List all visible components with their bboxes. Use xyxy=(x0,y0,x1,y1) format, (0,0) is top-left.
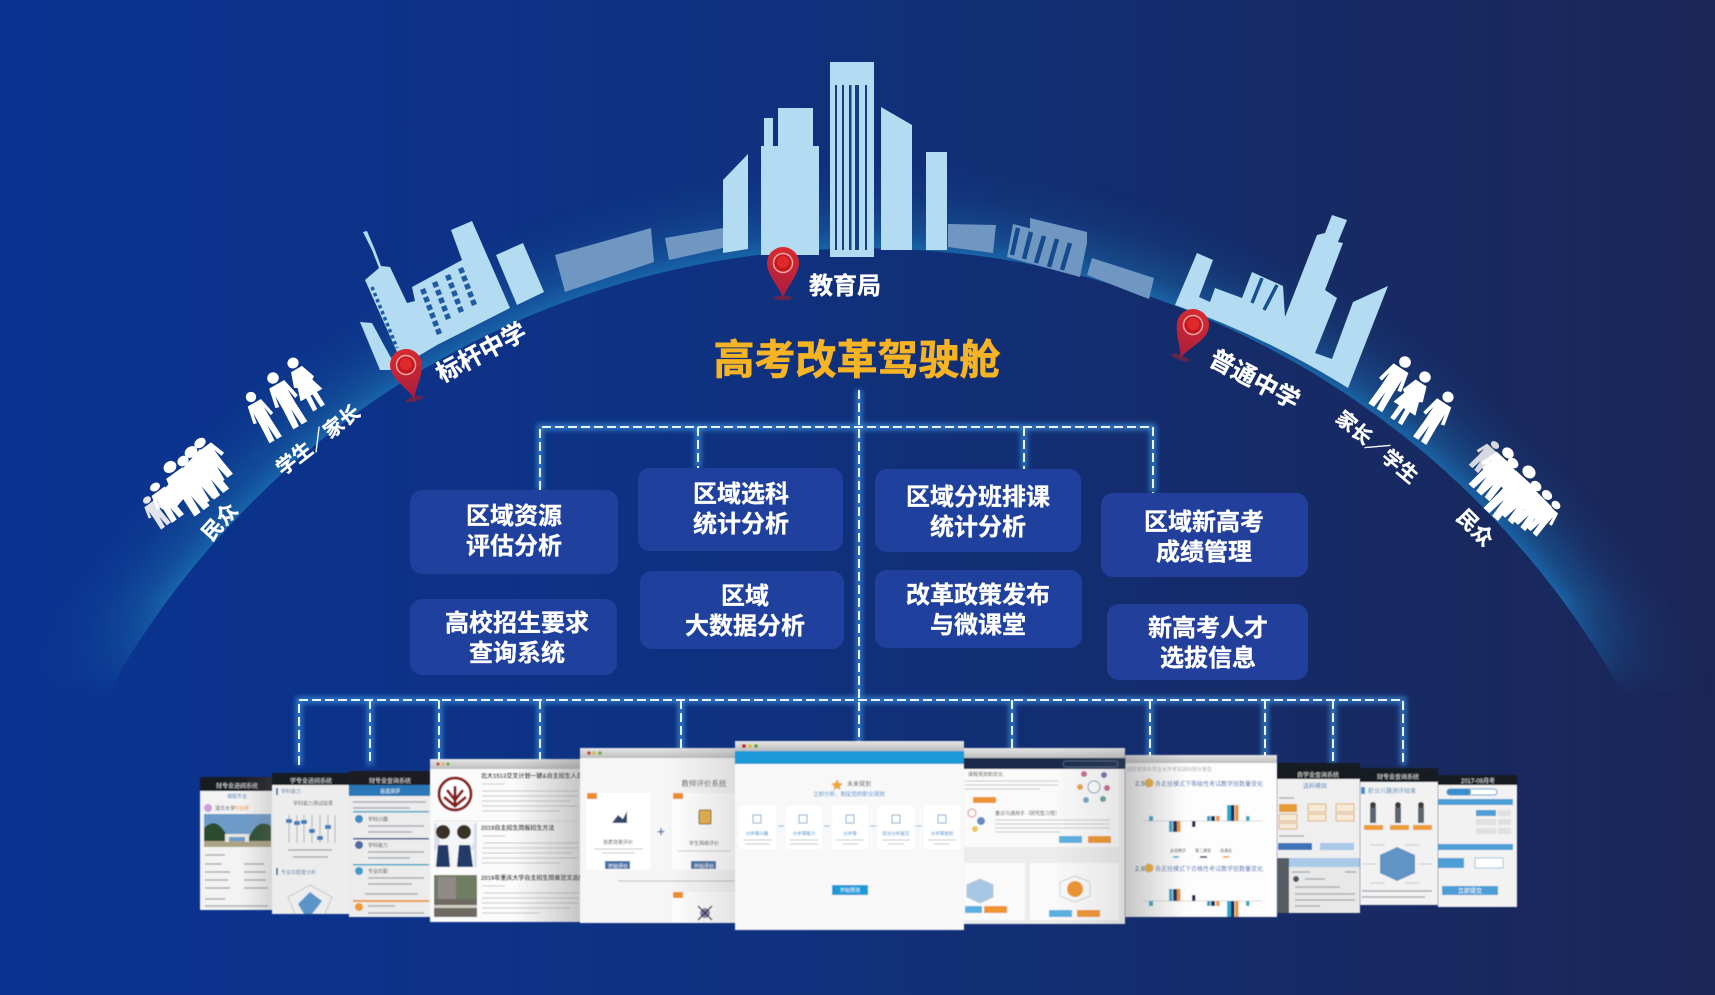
screenshot: phone, subject results: 学科兴趣 xyxy=(368,816,388,823)
module: class scheduling: 区域分班排课 xyxy=(906,484,1050,511)
module: talent selection: 新高考人才 xyxy=(1148,615,1268,642)
screenshot: browser, assessment dashboard xyxy=(962,748,1125,924)
module: class scheduling xyxy=(875,469,1081,552)
label: ordinary school: 普通中学 xyxy=(1205,345,1304,415)
screenshot: phone, subject results: 自选测评 xyxy=(380,788,400,795)
central education bureau buildings xyxy=(555,62,996,292)
screenshot: phone, subject results xyxy=(349,771,431,917)
module: big data xyxy=(640,571,844,649)
screenshot: browser, career planning main: 立即分析，制定您的职业规划 xyxy=(813,790,885,798)
screenshot: browser, teacher evaluation: 学生网络评价 xyxy=(689,840,719,847)
screenshot: phone, subject results: 财专业查询系统 xyxy=(369,777,411,785)
screenshot: report charts: 选课走 xyxy=(1220,847,1232,853)
screenshot: browser, teacher evaluation xyxy=(580,748,738,923)
screenshot: browser, career planning main xyxy=(735,741,964,930)
screenshot: phone, university profile: 财专业进阅系统 xyxy=(216,782,258,790)
screenshot: browser, teacher evaluation: 资质背景评价 xyxy=(603,839,633,846)
module: exam score management: 成绩管理 xyxy=(1156,539,1252,566)
label: parents and students, right: 家长／学生 xyxy=(1331,406,1423,488)
label: citizens, left: 民众 xyxy=(198,499,243,546)
screenshot: browser, assessment dashboard: 重点与通用手（研究型习惯） xyxy=(995,810,1060,817)
module: subject selection: 区域选科 xyxy=(693,481,789,508)
module: university admissions: 高校招生要求 xyxy=(445,610,589,637)
screenshot: browser, university news: 北大1513交叉计划一键&自主招生人员预计录取情况 xyxy=(481,772,619,780)
screenshot: browser, career planning main: 结合分析报告 xyxy=(882,830,910,837)
screenshot: phone, subject ability xyxy=(272,773,350,914)
screenshot: browser, university news xyxy=(430,759,619,922)
label: students and parents, left: 学生／家长 xyxy=(271,400,365,480)
module: talent selection: 选拔信息 xyxy=(1160,645,1256,672)
icon: family, left xyxy=(239,352,330,445)
screenshot: phone, subject choice: 选科模拟 xyxy=(1303,782,1327,790)
module: policy and micro lessons xyxy=(875,570,1082,648)
module: university admissions xyxy=(410,599,617,675)
screenshot: phone, career report xyxy=(1438,775,1517,907)
module: regional resources: 区域资源 xyxy=(466,503,562,530)
icon: crowd, left xyxy=(137,431,237,532)
module: policy and micro lessons: 改革政策发布 xyxy=(906,582,1050,609)
screenshot: phone, career types: 财专业查询系统 xyxy=(1377,773,1419,781)
screenshot: phone, university profile: 清华大学 xyxy=(215,805,235,812)
module: subject selection xyxy=(638,468,843,551)
pin: benchmark school xyxy=(387,346,431,405)
screenshot: browser, teacher evaluation: 开始评价 xyxy=(694,863,714,870)
pin: education bureau xyxy=(767,247,799,300)
screenshot: phone, university profile xyxy=(200,777,274,910)
module: exam score management xyxy=(1101,493,1308,577)
screenshot: browser, teacher evaluation: + xyxy=(657,824,665,839)
left school skyline xyxy=(360,221,544,370)
screenshot: browser, teacher evaluation: 开始评价 xyxy=(608,863,628,870)
label: citizens, right: 民众 xyxy=(1452,505,1498,551)
screenshot: phone, university profile: 可选择 xyxy=(234,805,249,812)
module: class scheduling: 统计分析 xyxy=(930,514,1026,541)
screenshot: browser, assessment dashboard: 课程规划和优化 xyxy=(968,771,1003,778)
module: exam score management: 区域新高考 xyxy=(1144,509,1264,536)
screenshot: browser, teacher evaluation: 教师评价系统 xyxy=(682,778,727,788)
module: regional resources xyxy=(410,490,618,574)
screenshot: phone, career types: 职业兴趣测评结果 xyxy=(1368,787,1416,795)
module: big data: 大数据分析 xyxy=(685,613,805,640)
title: 高考改革驾驶舱 xyxy=(714,337,1000,383)
screenshot: phone, subject ability: 学科能力 xyxy=(281,788,301,795)
colonnade building xyxy=(1007,218,1154,299)
screenshot: phone, career report: 2017-09月考 xyxy=(1461,777,1495,785)
screenshot: browser, career planning main: 分步骤能力 xyxy=(793,830,816,837)
pin: ordinary school xyxy=(1165,304,1214,366)
screenshot: phone, university profile: 课程专业 xyxy=(227,793,247,800)
screenshot: browser, career planning main: 开始预测 xyxy=(840,887,860,894)
screenshot: report charts: 财经类高中学业水平考试选科统计报告 xyxy=(1127,766,1212,773)
screenshot: report charts xyxy=(1125,755,1277,917)
screenshot: phone, subject ability: 学专业进阅系统 xyxy=(290,777,332,785)
label: benchmark school: 标杆中学 xyxy=(432,318,531,388)
screenshot: browser, career planning main: 分步骤兴趣 xyxy=(746,830,769,837)
icon: family, right xyxy=(1364,350,1462,447)
screenshot: report charts: 第二课堂 xyxy=(1195,847,1211,853)
screenshot: report charts: 2.6 xyxy=(1135,866,1145,873)
screenshot: phone, career report: 立即提交 xyxy=(1458,887,1482,895)
module: talent selection xyxy=(1107,604,1308,680)
screenshot: browser, career planning main: 分步骤规划 xyxy=(931,830,954,837)
screenshot: phone, subject results: 学科能力 xyxy=(368,842,388,849)
module: regional resources: 评估分析 xyxy=(466,533,562,560)
screenshot: report charts: 2.5 xyxy=(1135,781,1145,788)
screenshot: report charts: 各走班模式下合格性考试教学班数量变化 xyxy=(1155,865,1263,873)
right school skyline xyxy=(1175,215,1388,388)
screenshot: phone, career types xyxy=(1360,768,1438,905)
screenshot: browser, career planning main: 分步骤 xyxy=(843,830,857,837)
screenshot: browser, university news: 2019自主招生简报招生方法 xyxy=(481,824,554,832)
module: policy and micro lessons: 与微课堂 xyxy=(930,612,1026,639)
arc glow band xyxy=(94,196,1648,684)
screenshot: phone, subject choice: 自学业查询系统 xyxy=(1297,771,1339,779)
module: university admissions: 查询系统 xyxy=(469,640,565,667)
screenshot: browser, university news: 2019年重庆大学自主招生简章范文选择 xyxy=(481,874,584,882)
screenshot: report charts: 走班教学 xyxy=(1170,847,1186,853)
label: education bureau: 教育局 xyxy=(809,272,881,300)
icon: crowd, right xyxy=(1465,436,1567,539)
screenshot: phone, subject ability: 专业匹配度分析 xyxy=(281,869,316,876)
screenshot: browser, career planning main: 未来规划 xyxy=(847,780,871,788)
module: subject selection: 统计分析 xyxy=(693,511,789,538)
screenshot: phone, subject results: 专业匹配 xyxy=(368,868,388,875)
screenshot: report charts: 各走班模式下等级性考试教学班数量变化 xyxy=(1155,780,1263,788)
module: big data: 区域 xyxy=(721,583,769,610)
screenshot: phone, subject ability: 学科能力测试结果 xyxy=(293,800,333,807)
screenshot: phone, subject choice xyxy=(1277,763,1360,913)
connector tree xyxy=(299,390,1403,765)
